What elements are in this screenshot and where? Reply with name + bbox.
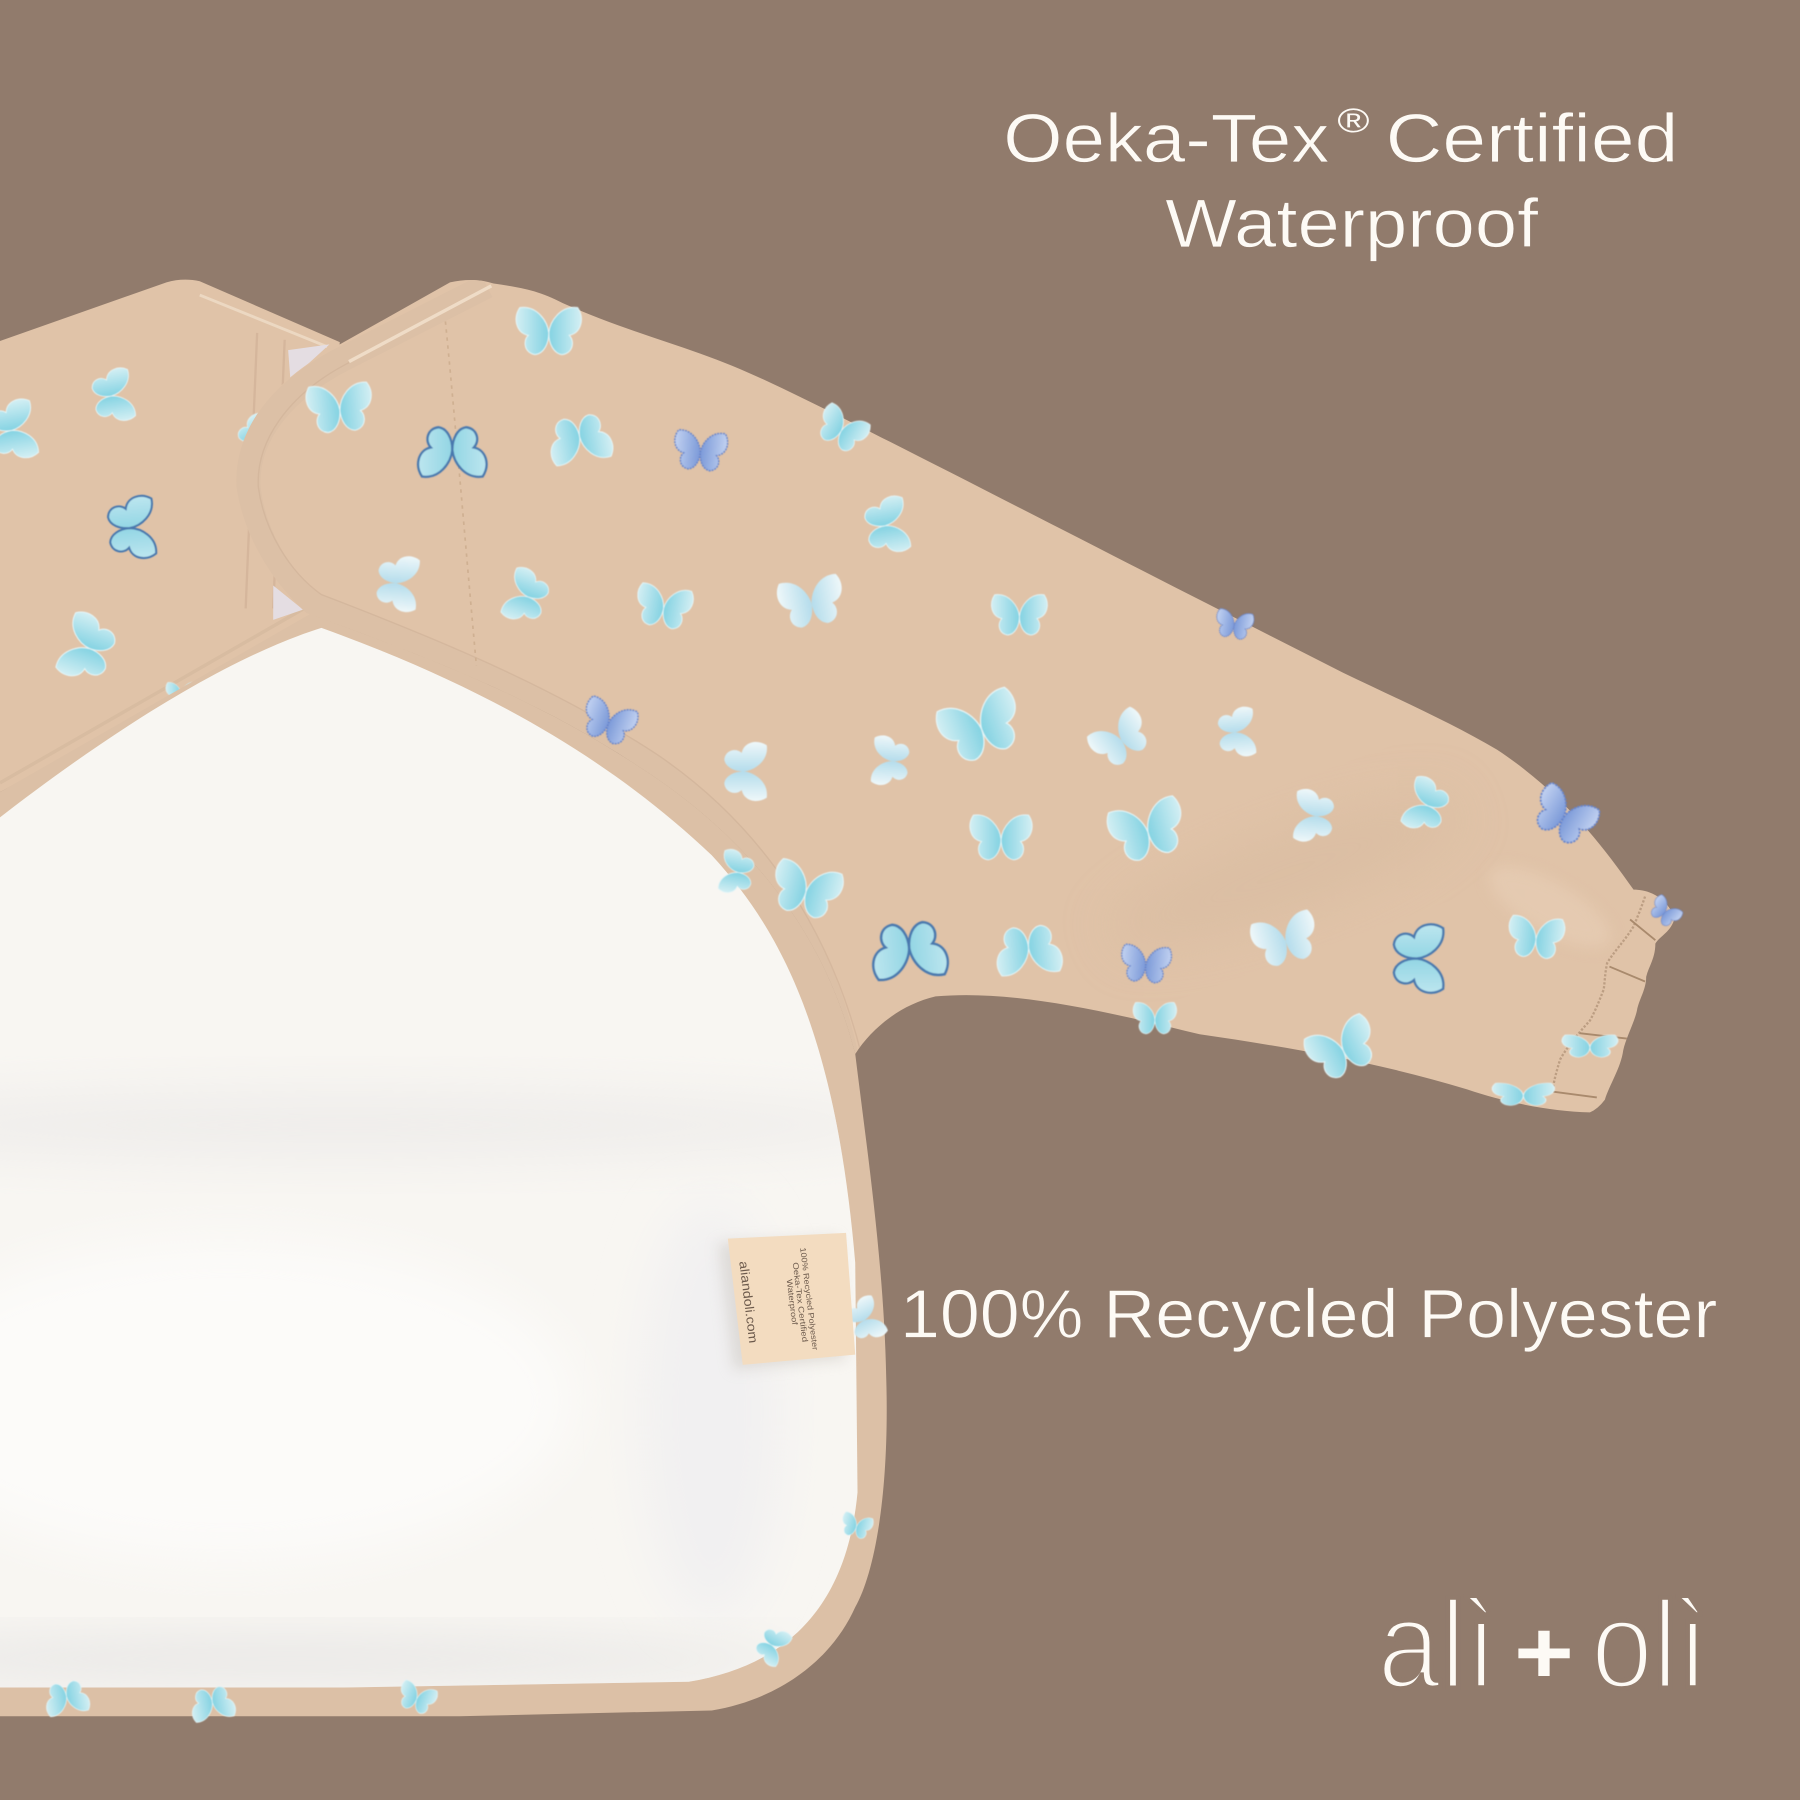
care label tag: 100% Recycled Polyester [798,1247,820,1351]
heading: Oeka-Tex Certified Waterproof [1003,100,1678,262]
cuff stitching and gathers [1553,897,1645,1087]
logo: ali + oli [1378,1577,1708,1715]
left shoulder strap [0,280,340,792]
bib outer binding [0,614,887,1716]
logo: ali + oli: alì [1378,1577,1497,1715]
heading: Oeka-Tex Certified Waterproof: ® [1337,102,1370,140]
bib sleeve and neck tab [236,280,1675,1112]
logo: ali + oli: + [1514,1602,1574,1702]
care label tag [719,1233,855,1370]
care label tag: Oeka-Tex Certified [791,1262,809,1343]
neck binding [248,286,847,1062]
label text: aliandoli.com [736,1260,760,1344]
care label tag: Waterproof [785,1279,799,1326]
butterflies on left strap [0,366,320,705]
velcro patches [273,344,329,620]
butterfly print [43,307,1684,1723]
bib product photo illustration [0,280,1684,1723]
heading: Oeka-Tex Certified Waterproof: Waterproof [1165,185,1539,262]
callout: 100% Recycled Polyester: 100% Recycled Polyester [900,1275,1717,1352]
logo: ali + oli: olì [1591,1577,1708,1715]
bib white inner panel [0,628,918,1688]
heading: Oeka-Tex Certified Waterproof: Oeka-Tex [1003,100,1329,177]
heading: Oeka-Tex Certified Waterproof: Certified [1386,100,1678,177]
shoulder seam [445,321,476,666]
